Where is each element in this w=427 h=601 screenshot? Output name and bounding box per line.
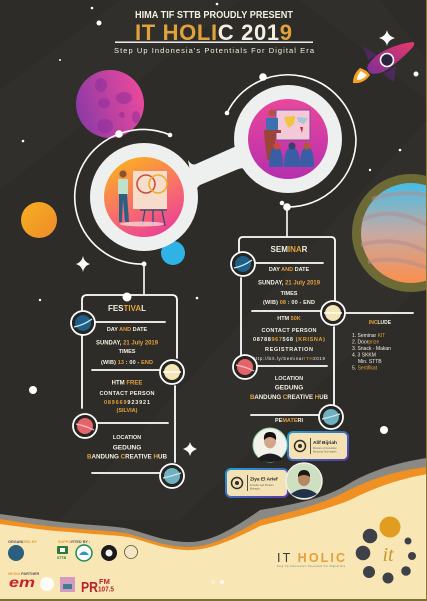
seminar details: CONTACT PERSON: [262, 328, 317, 334]
lens connector: [90, 85, 342, 251]
seminar frame lines: [239, 237, 413, 415]
speaker card: Ziya El Arief: [225, 468, 289, 498]
seminar details: SUNDAY, 21 July 2019: [258, 280, 320, 286]
seminar heading: SEMINAR: [271, 245, 308, 254]
arc dots: [115, 73, 291, 266]
logo: em: em: [9, 574, 35, 590]
logo: green round: [76, 545, 92, 561]
wave footer: [0, 458, 427, 601]
logo wordmark: IT HOLIC: [277, 551, 345, 565]
planet: large striped: [352, 174, 427, 292]
supported by label: SUPPORTED BY :: [58, 540, 90, 544]
speaker card: Ziya El Arief: Manager: [250, 488, 260, 490]
festival top notch: [122, 292, 132, 302]
seminar details: (WIB) 08 : 00 - END: [263, 300, 315, 306]
planet badge: teal: [319, 405, 343, 429]
seminar details: PEMATERI: [275, 418, 303, 424]
include list: 5. Sertifikat: [352, 366, 378, 372]
festival details: (SILVIA): [117, 408, 138, 414]
festival details: GEDUNG: [113, 444, 141, 452]
speaker card: Ziya El Arief: Ziya El Arief: [250, 476, 278, 482]
sponsors block: [8, 540, 138, 596]
logo: PR FM: 107.5: [98, 584, 114, 594]
logo script it: it: [382, 544, 394, 566]
organized by label: ORGANIZED BY: [8, 540, 38, 544]
seminar details: BANDUNG CREATIVE HUB: [250, 394, 328, 401]
planet badge: coral: [233, 355, 257, 379]
planet badge: cream: [160, 360, 184, 384]
subtitle: Step Up Indonesia's Potentials For Digital Era: [114, 46, 315, 55]
seminar details: HTM 50K: [277, 316, 301, 322]
background star dots: [22, 3, 418, 434]
festival details: 089669923921: [104, 400, 150, 406]
logo: white round: [40, 577, 54, 591]
logo: pink square: [60, 577, 75, 592]
seminar details: 08788967568 (KRISNA): [253, 337, 325, 343]
logo: PR FM: FM: [99, 577, 110, 586]
logo: PR FM: [81, 577, 114, 596]
logo: PR FM: PR: [81, 579, 98, 596]
panel: seminar: [231, 237, 413, 429]
event logo: [277, 516, 416, 584]
festival frame lines: [82, 295, 177, 473]
speaker card: Alif Bijriah: [287, 431, 349, 461]
planet: blue: [161, 241, 185, 265]
logo: outline crest: [124, 546, 138, 558]
rocket: [353, 42, 414, 83]
festival details: CONTACT PERSON: [100, 391, 155, 397]
panel: festival: [71, 292, 184, 488]
seminar details: REGISTRATION: [265, 347, 313, 353]
planet badge: blue: [71, 311, 95, 335]
logo tagline: Step Up Indonesia's Potentials For Digital Era: [277, 565, 346, 568]
illustration: presenter at chart: [104, 157, 184, 237]
seminar details: LOCATION: [275, 376, 303, 382]
include list: Min. STTB: [358, 359, 382, 365]
title block: [114, 9, 315, 55]
festival details: BANDUNG CREATIVE HUB: [87, 454, 167, 460]
logo: black round: [101, 545, 117, 561]
planet badge: blue: [231, 252, 255, 276]
sparkle stars: [76, 30, 395, 456]
festival details: DAY AND DATE: [107, 327, 148, 333]
seminar details: GEDUNG: [275, 384, 303, 392]
festival details: TIMES: [119, 349, 136, 355]
planet badge: teal: [160, 464, 184, 488]
festival details: HTM FREE: [112, 380, 142, 386]
festival details: [87, 327, 167, 460]
seminar details: DAY AND DATE: [269, 267, 310, 273]
planet: magenta: [76, 70, 144, 138]
speaker card: Alif Bijriah: Alif Bijriah: [313, 440, 337, 446]
title rule: [115, 42, 313, 43]
include list: [352, 320, 392, 372]
seminar details: http://bit.ly/SeminarITH2019: [253, 356, 325, 361]
festival details: (WIB) 13 : 00 - END: [101, 360, 153, 366]
include list: 1. Seminar KIT: [352, 333, 385, 339]
logo: STTB: STTB: [57, 556, 67, 560]
organizer logo: [8, 545, 24, 561]
photo: Alif: [253, 428, 287, 462]
media partner label: MEDIA PARTNER: [8, 572, 39, 576]
festival heading: FESTIVAL: [108, 304, 146, 313]
include list: 3. Snack - Makan: [352, 346, 391, 352]
seminar details: [250, 267, 328, 424]
logo dot ring: [356, 516, 416, 584]
photo: Ziya: [286, 463, 322, 499]
right edge line: [426, 0, 427, 601]
planet badge: cream: [321, 301, 345, 325]
festival details: LOCATION: [113, 435, 141, 441]
include list: 4. 3 SKKM: [352, 352, 376, 358]
heading: IT HOLIC 2019: IT HOLIC 2019: [135, 20, 292, 45]
illustration: speaker and audience: [248, 99, 328, 179]
seminar details: TIMES: [281, 291, 298, 297]
speaker card: Alif Bijriah: Bandung Technopark: [313, 450, 337, 454]
festival details: SUNDAY, 21 July 2019: [96, 340, 158, 346]
carousel dots: [211, 580, 224, 584]
speaker card: Alif Bijriah: Director of Innovation: [313, 447, 337, 450]
planet badge: coral: [73, 414, 97, 438]
heading: proudly present: HIMA TIF STTB PROUDLY PRESENT: [135, 9, 294, 21]
speaker card: Ziya El Arief: Founder and Product: [250, 484, 274, 487]
include list: 2. Doorprize: [352, 340, 379, 346]
include list: INCLUDE: [369, 320, 392, 326]
connector arcs: [75, 75, 356, 295]
planet: orange: [21, 202, 57, 238]
